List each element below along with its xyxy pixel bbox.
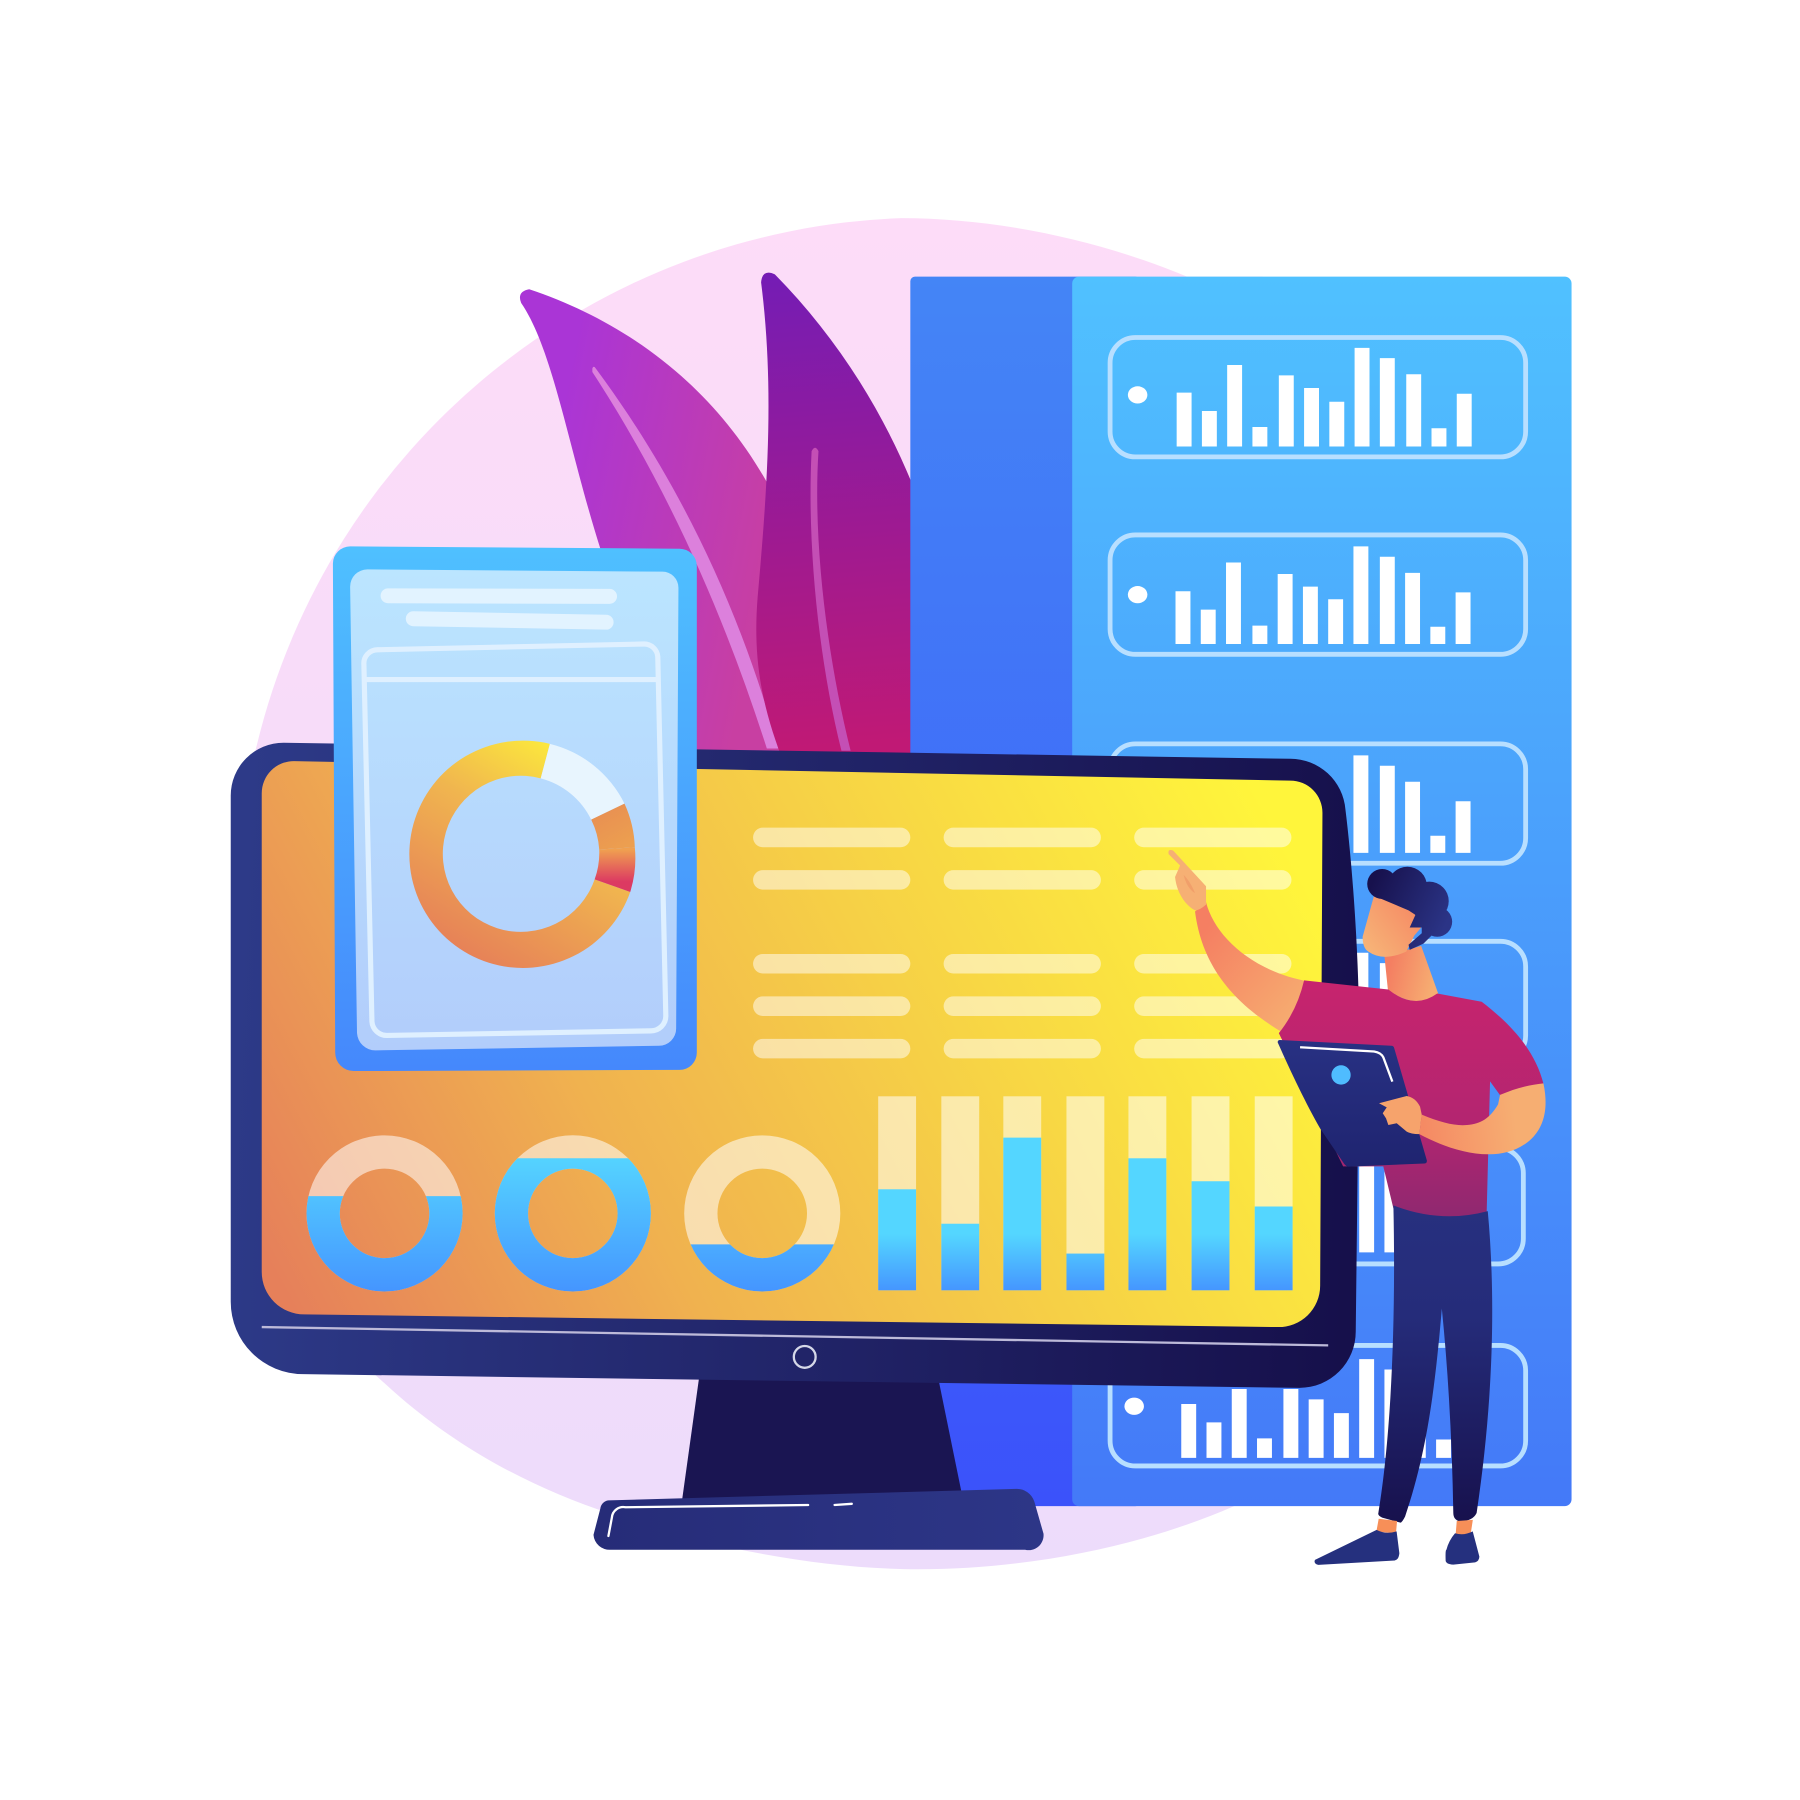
monitor [231,743,1359,1550]
illustration [230,218,1572,1570]
monitor bezel [231,743,1359,1388]
leaf vein: right [811,448,851,751]
tablet body [333,546,697,1071]
server front face [1072,277,1572,1506]
clipboard [1278,1040,1427,1167]
leaf: left purple [520,289,792,758]
forearm [1419,1083,1546,1154]
monitor screen [262,761,1322,1327]
monitor stand [682,1378,962,1502]
raised arm [1195,902,1309,1033]
shirt [1279,980,1543,1219]
server panel [910,277,1572,1506]
left shoe [1315,1530,1399,1565]
leaf vein: left [592,367,778,748]
neck [1384,946,1438,1001]
tablet text lines [388,596,610,622]
rack unit 3 [1110,744,1526,863]
rack unit 2 [1110,535,1526,654]
holding hand [1379,1096,1422,1134]
power button [794,1346,816,1368]
ankles [1376,1519,1473,1535]
text lines on screen [753,828,1291,1058]
tablet screen [350,569,678,1050]
person [1168,850,1546,1565]
stacked bar chart [878,1096,1293,1290]
gauge donut 2 [495,1135,651,1292]
leaf: right magenta [756,273,911,758]
gauge donut 3 [684,1135,840,1291]
background blob [233,218,1263,1569]
rack unit 5 [1110,1148,1523,1264]
pointing hand [1168,850,1206,910]
pants [1378,1205,1492,1523]
right shoe [1446,1531,1479,1565]
hair [1367,867,1452,950]
rack unit 6 [1110,1345,1526,1466]
bezel line [262,1327,1328,1345]
gauge donut 1 [307,1135,463,1291]
leaves [520,273,911,758]
tablet donut chart [409,741,635,968]
rack unit 1 [1110,338,1526,457]
monitor base [593,1489,1044,1550]
tablet inner frame [364,644,666,1035]
tablet [333,546,697,1071]
rack unit 4 [1110,941,1526,1061]
face [1363,895,1421,957]
server side face [910,277,1140,1506]
